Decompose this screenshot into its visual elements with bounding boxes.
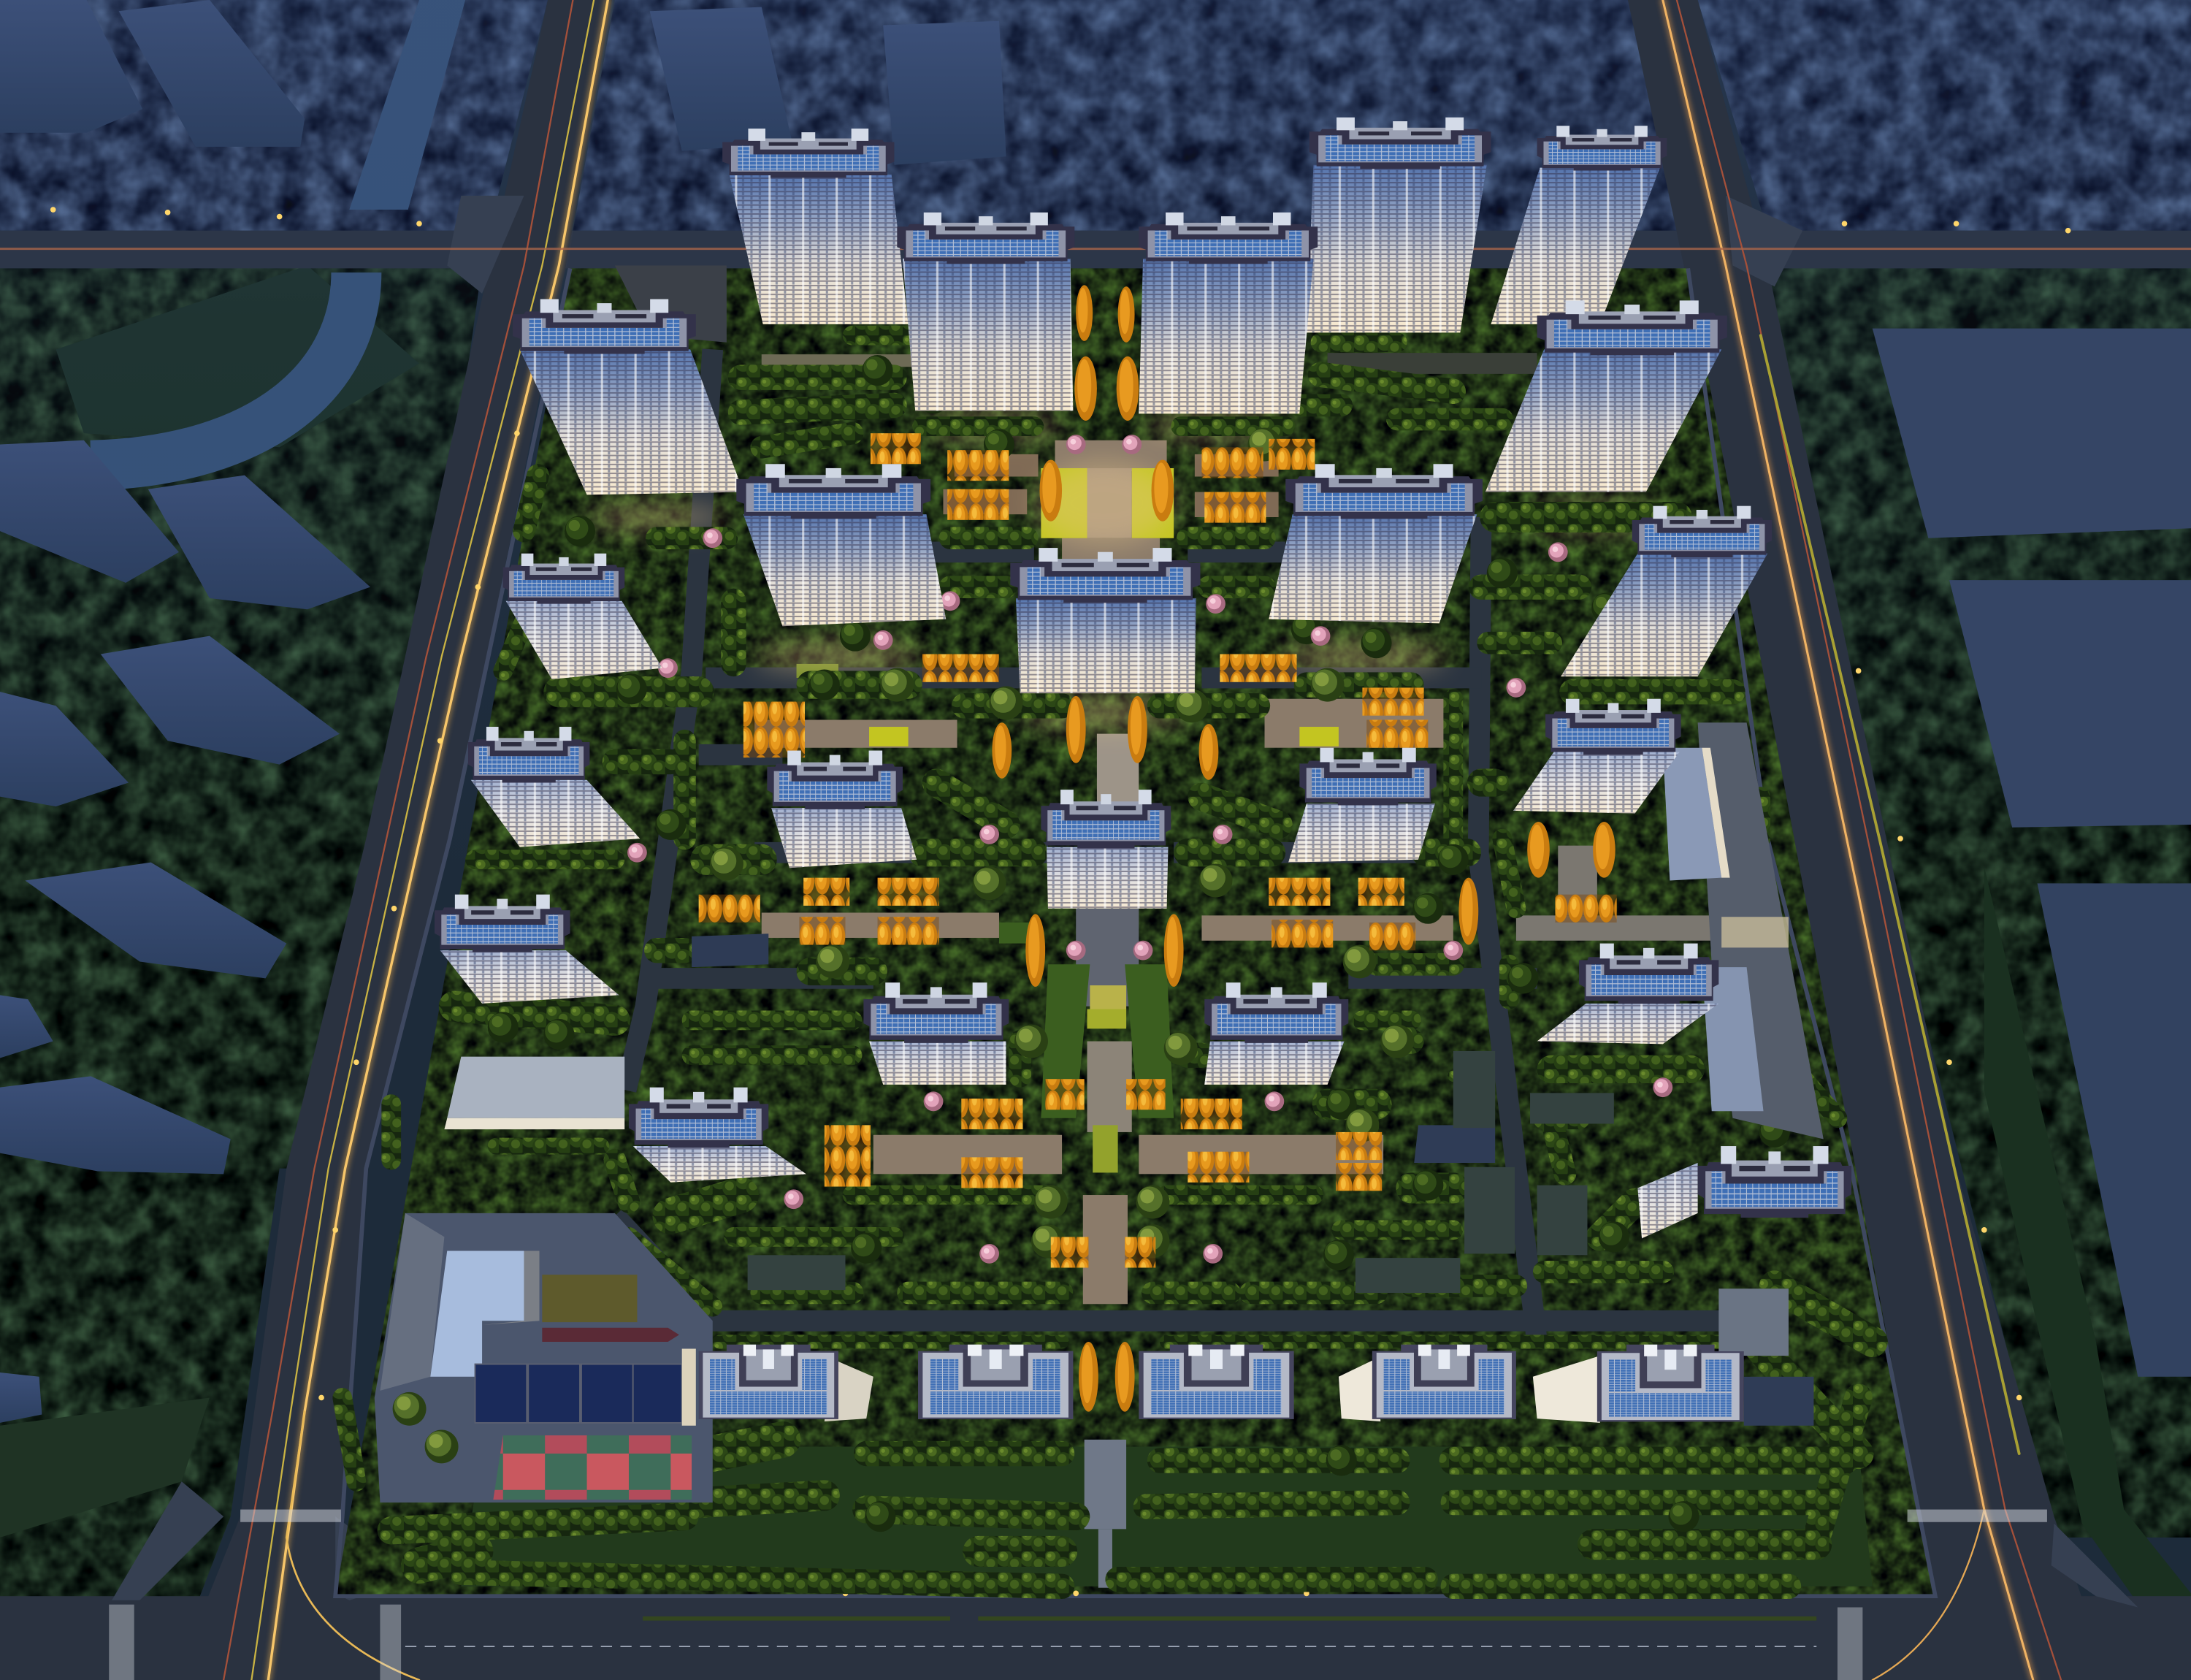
site base lawn bbox=[335, 268, 1935, 1596]
blue haze over the distance bbox=[0, 0, 2191, 895]
lower-left lawn bbox=[0, 1397, 210, 1538]
road: left main avenue bbox=[175, 0, 612, 1680]
school campus bbox=[375, 1213, 713, 1503]
road: bottom east-west bbox=[0, 1596, 2191, 1680]
school sports ground bbox=[542, 1275, 637, 1322]
tower 18 bbox=[435, 895, 619, 1004]
tower 3 bbox=[1139, 213, 1318, 413]
lawn near river bbox=[56, 266, 419, 447]
tower 22 bbox=[629, 1088, 806, 1183]
tower 10 bbox=[1010, 548, 1200, 693]
outer woodland: right side bbox=[1767, 266, 2191, 1538]
canopy end wall bbox=[682, 1349, 696, 1426]
low-rise 1 bbox=[699, 1345, 873, 1421]
tower 16 bbox=[1288, 748, 1437, 863]
low-rise 3 bbox=[1139, 1345, 1294, 1419]
river lower bend bbox=[91, 272, 356, 465]
towers: middle row bbox=[468, 464, 1772, 909]
median on bottom road bbox=[643, 1617, 1816, 1619]
tower 9 bbox=[1269, 464, 1483, 623]
central yellow-green lit lawns bbox=[797, 468, 1339, 1172]
low-rise 5 bbox=[1533, 1345, 1744, 1423]
tower 2 bbox=[897, 213, 1074, 411]
road: top east-west bbox=[0, 231, 2191, 268]
tower 5 bbox=[1491, 126, 1667, 324]
small pavilion west bbox=[692, 933, 768, 967]
pavilion south east bbox=[1744, 1377, 1813, 1426]
pink blossom trees bbox=[627, 435, 1672, 1264]
towers: lower rows bbox=[435, 895, 1851, 1238]
central paved path south bbox=[1085, 1440, 1126, 1588]
towers: far row bbox=[513, 118, 1727, 495]
commercial strip east: plaza and roofs bbox=[1663, 722, 1824, 1139]
outer woodland: left side bbox=[0, 266, 482, 1680]
solar canopy bbox=[475, 1364, 682, 1423]
dashed lane on bottom road bbox=[405, 1646, 1816, 1647]
tower 4 bbox=[1307, 118, 1491, 332]
low-rise 4 bbox=[1339, 1345, 1516, 1421]
river upper bbox=[349, 0, 465, 210]
road: right main avenue bbox=[1628, 0, 2110, 1680]
tower 11 bbox=[503, 554, 662, 679]
outer woodland: top band bbox=[0, 0, 548, 231]
central green lawns around the axis bbox=[999, 923, 1174, 1118]
grass pavers bbox=[748, 1051, 1614, 1293]
tower 7 bbox=[1485, 300, 1727, 492]
low-rise row bbox=[699, 1345, 1744, 1423]
tower 14 bbox=[1513, 699, 1681, 814]
internal ring roads bbox=[615, 349, 1732, 1342]
tree rows and hedges bbox=[343, 335, 1873, 1587]
gymnasium building bbox=[444, 1057, 624, 1129]
light trails: left avenue bbox=[223, 0, 608, 1680]
tower 13 bbox=[468, 727, 640, 847]
tower 17 bbox=[1041, 790, 1171, 909]
specimen green trees bbox=[488, 355, 1790, 1532]
running track marker bbox=[542, 1328, 679, 1342]
tower 12 bbox=[1561, 506, 1772, 676]
school lit walkway bbox=[380, 1213, 444, 1391]
school main building roof bbox=[430, 1251, 524, 1377]
tower 21 bbox=[1204, 982, 1348, 1085]
tower 15 bbox=[767, 751, 917, 868]
central axis paved plazas bbox=[754, 440, 1740, 1304]
outer woodland: right top bbox=[1698, 0, 2191, 231]
tower 23 bbox=[1637, 1146, 1851, 1238]
tower 20 bbox=[863, 982, 1009, 1085]
school annex bbox=[482, 1251, 540, 1325]
park below low-rise row bbox=[461, 1446, 1873, 1587]
right lawn strip bbox=[1984, 866, 2191, 1680]
dark pavilion north-west bbox=[615, 266, 727, 343]
tower 19 bbox=[1537, 944, 1718, 1044]
tower 1 bbox=[722, 129, 909, 324]
tower 8 bbox=[736, 464, 946, 626]
light trails: right avenue bbox=[1663, 0, 2061, 1680]
sports court bbox=[493, 1435, 692, 1500]
autumn orange tree clusters bbox=[699, 433, 1617, 1268]
pavilion mid east bbox=[1414, 1125, 1495, 1163]
intersection aprons bbox=[112, 196, 2138, 1607]
lit path top-left bbox=[762, 357, 922, 364]
courtyard trees bbox=[393, 1392, 459, 1463]
outer woodland: top centre bbox=[573, 0, 1683, 231]
low-rise 2 bbox=[918, 1345, 1073, 1419]
glow under towers bbox=[587, 412, 1663, 730]
street lamps bbox=[50, 207, 2070, 1596]
light trails: top road bbox=[0, 248, 2191, 250]
tower 6 bbox=[513, 299, 743, 495]
crosswalks bbox=[109, 1510, 2047, 1680]
tall orange poplars along the axis bbox=[992, 285, 1615, 1412]
school plaza bbox=[375, 1213, 713, 1503]
paved corner southeast bbox=[1718, 1288, 1789, 1356]
sidewalks around site bbox=[335, 268, 1935, 1596]
